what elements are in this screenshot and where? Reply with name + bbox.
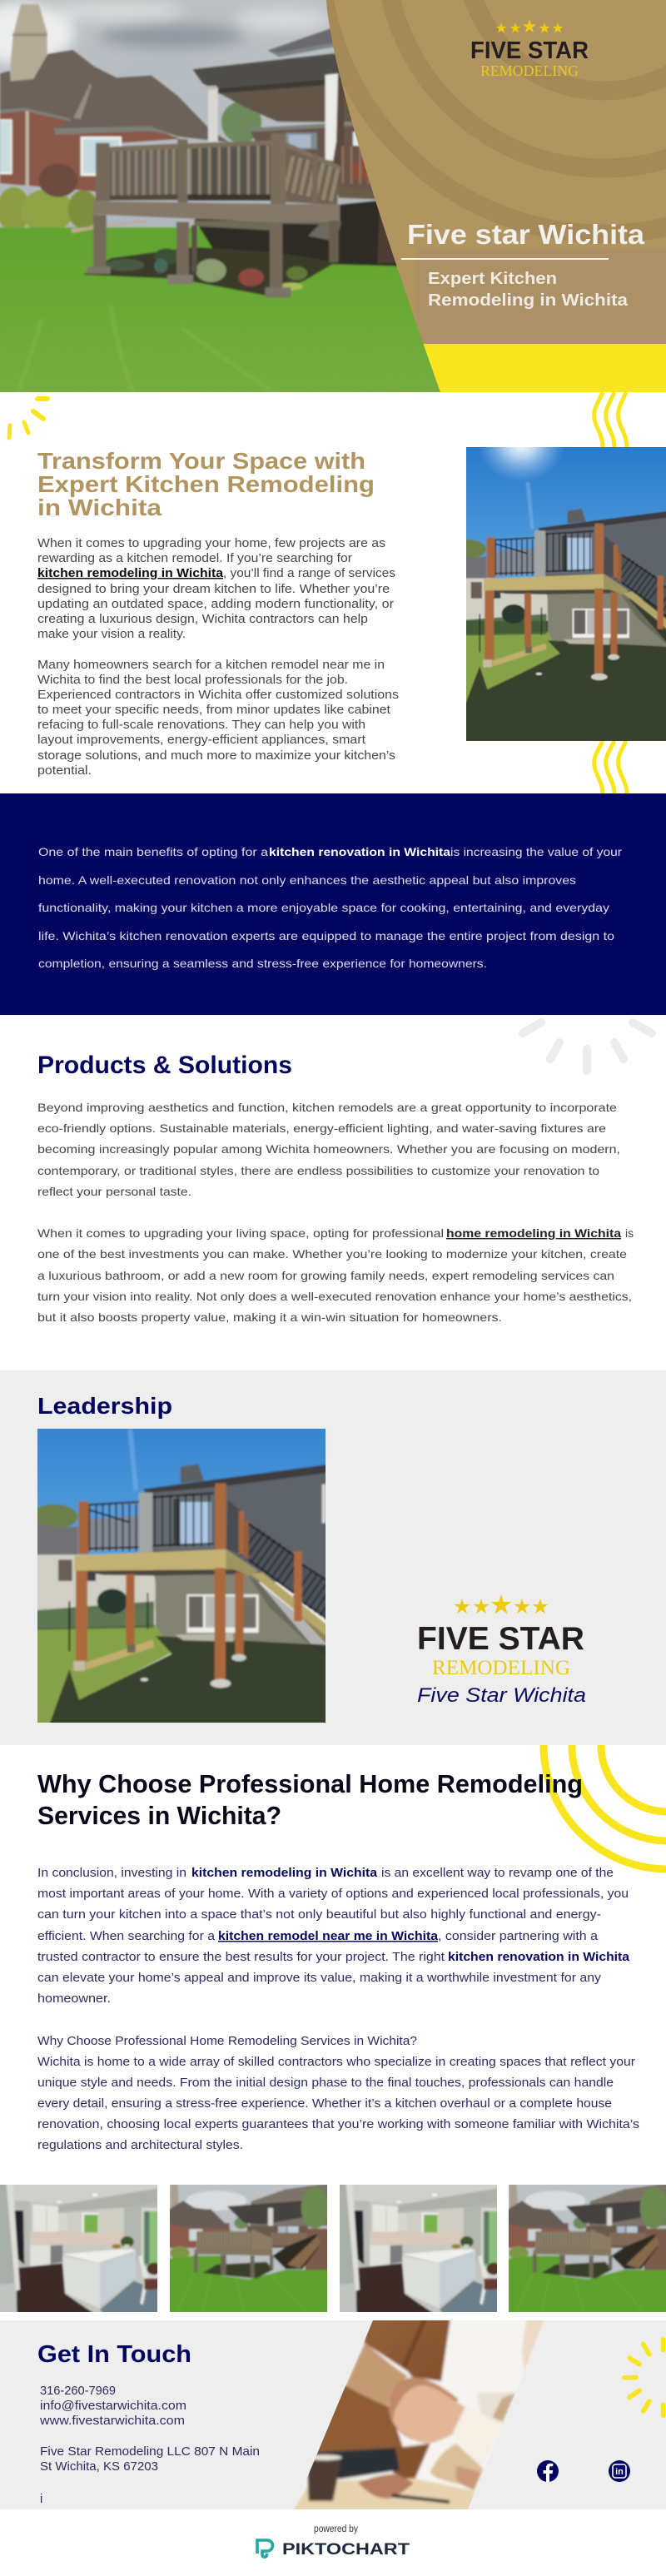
text block: renovation benefits: home. A well-executed renovation not only enhances the aesthetic appeal but also improves bbox=[38, 873, 576, 887]
hero title: Five star Wichita bbox=[407, 219, 645, 250]
text block: contact details bbox=[39, 2384, 186, 2428]
text block: why choose details: regulations and architectural styles. bbox=[37, 2139, 243, 2152]
logo with company name: FIVE STAR bbox=[417, 1621, 584, 1657]
heading: in Wichita bbox=[37, 495, 162, 520]
panel: navy kitchen renovation benefits bbox=[0, 793, 666, 1015]
text block: renovation benefits: One of the main benefits of opting for a bbox=[38, 845, 268, 858]
text block: homeowners search: layout improvements, energy-efficient appliances, smart bbox=[37, 734, 365, 747]
heading: Why Choose Professional Home Remodeling bbox=[37, 1769, 583, 1798]
text block: why choose details: Wichita is home to a wide array of skilled contractors who specialize in creating spaces that reflect your bbox=[37, 2056, 635, 2069]
panel: why choose professional remodeling bbox=[37, 1745, 666, 2151]
text block: conclusion: kitchen remodel near me in Wichita bbox=[218, 1930, 439, 1943]
text block: why choose details: Why Choose Professional Home Remodeling Services in Wichita? bbox=[37, 2035, 417, 2048]
text block: homeowners search: Wichita to find the best local professionals for the job. bbox=[37, 674, 348, 687]
text block: kitchen remodel intro: , you’ll find a range of services bbox=[223, 567, 395, 580]
photo: kitchen one bbox=[0, 2181, 162, 2316]
text block: conclusion: is an excellent way to revamp one of the bbox=[381, 1867, 614, 1880]
text block: renovation benefits: functionality, making your kitchen a more enjoyable space for cooking, entertaining, and everyday bbox=[38, 901, 609, 914]
icon: gray sun rays bbox=[523, 1022, 652, 1071]
logo: five star remodeling bbox=[470, 19, 589, 79]
text block: renovation benefits: kitchen renovation in Wichita bbox=[269, 845, 450, 858]
text block: address bbox=[40, 2444, 260, 2506]
text block: conclusion: can turn your kitchen into a space that’s not only beautiful but also highly functional and energy- bbox=[37, 1908, 601, 1922]
decoration: yellow concentric arcs bbox=[539, 1745, 666, 1873]
decoration: wavy lines bottom bbox=[594, 741, 627, 793]
icon: linkedin: in bbox=[615, 2467, 624, 2477]
text block: kitchen remodel intro: When it comes to upgrading your home, few projects are as bbox=[37, 537, 385, 550]
logo with company name bbox=[417, 1594, 586, 1707]
text block: why choose details bbox=[37, 2035, 639, 2152]
hero photo: deck with pergola and lawn bbox=[0, 0, 450, 397]
hero subtitle bbox=[401, 258, 629, 310]
text block: conclusion: trusted contractor to ensure the best results for your project. The right bbox=[37, 1951, 445, 1964]
photo: handshake bbox=[294, 2320, 545, 2509]
text block: conclusion: kitchen renovation in Wichita bbox=[448, 1951, 630, 1964]
text block: why choose details: unique style and needs. From the initial design phase to the final touches, professionals can handle bbox=[37, 2076, 614, 2090]
decoration: wavy lines top bbox=[594, 392, 627, 447]
heading: Transform Your Space with bbox=[37, 448, 365, 474]
text block: eco-friendly options bbox=[37, 1101, 620, 1198]
panel: products and solutions bbox=[37, 1022, 652, 1324]
text block: address: Five Star Remodeling LLC 807 N Main bbox=[40, 2444, 260, 2459]
powered by label: powered by bbox=[314, 2524, 358, 2534]
text block: kitchen remodel intro: rewarding as a kitchen remodel. If you’re searching for bbox=[37, 552, 352, 565]
lawn mowing stripes bbox=[25, 306, 246, 386]
text block: address: St Wichita, KS 67203 bbox=[40, 2459, 158, 2474]
text block: kitchen remodel intro bbox=[37, 537, 395, 641]
text block: conclusion bbox=[37, 1867, 630, 2006]
logo with company name: Five Star Wichita bbox=[417, 1684, 586, 1707]
text block: eco-friendly options: becoming increasingly popular among Wichita homeowners. Whether you are focusing on modern, bbox=[37, 1142, 620, 1156]
photo: kitchen two bbox=[340, 2185, 497, 2312]
text block: home remodeling: home remodeling in Wichita bbox=[446, 1226, 621, 1240]
panel: leadership bbox=[0, 1370, 666, 1745]
heading bbox=[37, 448, 375, 520]
text block: homeowners search: Many homeowners search for a kitchen remodel near me in bbox=[37, 659, 385, 672]
text block: why choose details: every detail, ensuring a stress-free experience. Whether it’s a kitchen overhaul or a complete house bbox=[37, 2097, 612, 2111]
tan diagonal panel with arcs bbox=[320, 0, 666, 392]
text block: home remodeling bbox=[37, 1226, 634, 1324]
text block: homeowners search: refacing to full-scale renovations. They can help you with bbox=[37, 719, 365, 732]
text block: contact details: info@fivestarwichita.com bbox=[40, 2399, 186, 2413]
text block: conclusion: most important areas of your home. With a variety of options and experienced local professionals, you bbox=[37, 1887, 629, 1901]
text block: eco-friendly options: eco-friendly options. Sustainable materials, energy-efficient lighting, and water-saving fixtures are bbox=[37, 1121, 606, 1135]
icon: piktochart logo bbox=[257, 2540, 273, 2557]
text block: renovation benefits: completion, ensuring a seamless and stress-free experience for homeowners. bbox=[38, 957, 487, 970]
panel: get in touch footer bbox=[0, 2315, 666, 2517]
text block: home remodeling: turn your vision into reality. Not only does a well-executed renovation enhance your home’s aesthetics, bbox=[37, 1290, 632, 1303]
text block: kitchen remodel intro: make your vision a reality. bbox=[37, 628, 186, 641]
text block: eco-friendly options: Beyond improving aesthetics and function, kitchen remodels are a great opportunity to incorporate bbox=[37, 1101, 617, 1114]
photo gallery strip bbox=[0, 2181, 666, 2316]
icon: linkedin bbox=[609, 2460, 630, 2482]
text block: conclusion: kitchen remodeling in Wichita bbox=[191, 1867, 378, 1880]
text block: home remodeling: but it also boosts property value, making it a win-win situation for homeowners. bbox=[37, 1310, 502, 1324]
text block: home remodeling: one of the best investments you can make. Whether you’re looking to modernize your kitchen, create bbox=[37, 1247, 627, 1261]
photo: stair deck under blue sky bbox=[466, 447, 666, 741]
photo: stair deck bbox=[37, 1429, 326, 1723]
logo: five star remodeling: FIVE STAR bbox=[470, 37, 589, 64]
text block: contact details: 316-260-7969 bbox=[40, 2384, 116, 2398]
hero subtitle: Remodeling in Wichita bbox=[428, 291, 629, 310]
text block: eco-friendly options: reflect your personal taste. bbox=[37, 1185, 191, 1198]
text block: kitchen remodel intro: updating an outdated space, adding modern functionality, or bbox=[37, 598, 394, 611]
icon: yellow sun rays bbox=[624, 2340, 664, 2415]
hero subtitle: Expert Kitchen bbox=[428, 270, 557, 288]
heading: Products & Solutions bbox=[37, 1052, 292, 1079]
text block: homeowners search bbox=[37, 659, 399, 778]
heading: Services in Wichita? bbox=[37, 1801, 281, 1830]
text block: conclusion: In conclusion, investing in bbox=[37, 1867, 186, 1880]
panel: transform your space bbox=[9, 392, 666, 797]
text block: contact details: www.fivestarwichita.com bbox=[39, 2414, 185, 2428]
text block: why choose details: renovation, choosing local experts guarantees that you’re working with someone familiar with Wichita’s bbox=[37, 2118, 639, 2131]
photo: deck one bbox=[170, 2185, 327, 2312]
piktochart attribution bbox=[257, 2524, 410, 2559]
text block: conclusion: homeowner. bbox=[37, 1992, 111, 2006]
text block: home remodeling: is bbox=[625, 1226, 634, 1240]
text block: homeowners search: to meet your specific needs, from minor updates like cabinet bbox=[37, 704, 390, 717]
icon: yellow sun rays bbox=[9, 399, 47, 438]
text block: renovation benefits: life. Wichita’s kitchen renovation experts are equipped to manage the entire project from design to bbox=[38, 929, 614, 942]
text block: renovation benefits bbox=[38, 845, 622, 970]
heading: Get In Touch bbox=[37, 2341, 191, 2368]
text block: home remodeling: a luxurious bathroom, or add a new room for growing family needs, expert remodeling services can bbox=[37, 1269, 614, 1282]
logo: five star remodeling: REMODELING bbox=[480, 62, 579, 79]
text block: renovation benefits: is increasing the value of your bbox=[450, 845, 622, 858]
text block: homeowners search: potential. bbox=[37, 764, 92, 778]
text block: conclusion: can elevate your home’s appeal and improve its value, making it a worthwhile investment for any bbox=[37, 1972, 602, 1985]
text block: eco-friendly options: contemporary, or traditional styles, there are endless possibilities to customize your renovation to bbox=[37, 1164, 599, 1177]
piktochart wordmark: PIKTOCHART bbox=[282, 2541, 410, 2559]
heading: Leadership bbox=[37, 1393, 172, 1419]
text block: conclusion: efficient. When searching for a bbox=[37, 1930, 216, 1943]
text block: home remodeling: When it comes to upgrading your living space, opting for professional bbox=[37, 1226, 444, 1240]
text block: kitchen remodel intro: creating a luxurious design, Wichita contractors can help bbox=[37, 613, 368, 626]
logo with company name: REMODELING bbox=[432, 1657, 570, 1679]
text block: kitchen remodel intro: kitchen remodeling in Wichita bbox=[37, 567, 224, 580]
text block: kitchen remodel intro: designed to bring your dream kitchen to life. Whether you’re bbox=[37, 583, 390, 596]
text block: homeowners search: Experienced contractors in Wichita offer customized solutions bbox=[37, 689, 399, 702]
text block: homeowners search: storage solutions, and much more to maximize your kitchen’s bbox=[37, 749, 395, 763]
heading bbox=[37, 1769, 583, 1830]
text block: conclusion: , consider partnering with a bbox=[438, 1930, 599, 1943]
photo: deck two bbox=[504, 2181, 666, 2316]
text block: address: i bbox=[40, 2492, 42, 2506]
heading: Expert Kitchen Remodeling bbox=[37, 471, 375, 497]
panel: hero banner bbox=[0, 0, 666, 397]
icon: facebook bbox=[537, 2460, 559, 2482]
